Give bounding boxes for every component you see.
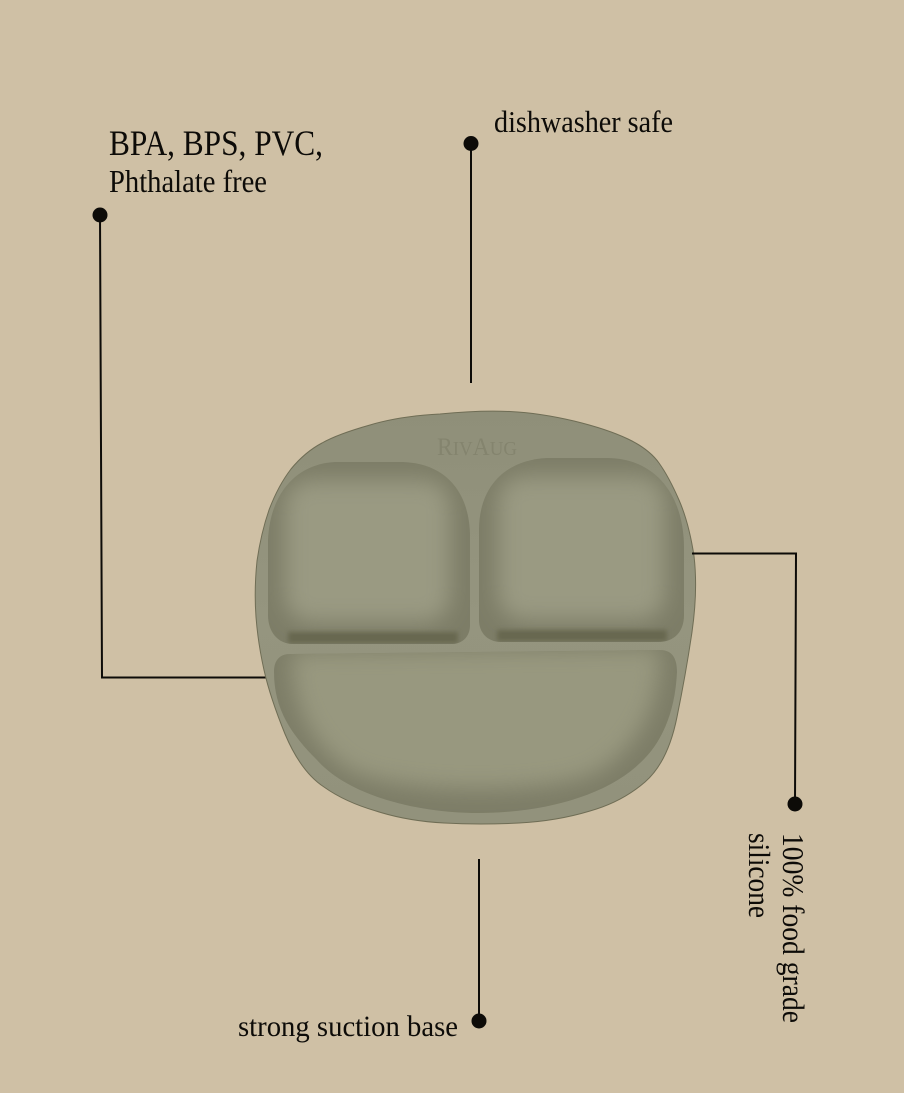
leader line with dot: food grade silicone xyxy=(692,554,802,812)
callout: dishwasher safe xyxy=(464,104,673,383)
callout: strong suction base xyxy=(238,859,486,1043)
compartment: top right xyxy=(479,458,684,642)
infographic canvas xyxy=(92,110,805,1042)
label: 100% food grade silicone: silicone xyxy=(742,833,777,918)
label: strong suction base: strong suction base xyxy=(238,1010,458,1043)
label: 100% food grade silicone xyxy=(742,833,811,1023)
leader line with dot: dishwasher safe xyxy=(464,136,478,383)
label: BPA, BPS, PVC, Phthalate free: Phthalate free xyxy=(109,163,267,199)
label: BPA, BPS, PVC, Phthalate free xyxy=(109,123,323,199)
label: BPA, BPS, PVC, Phthalate free: BPA, BPS, PVC, xyxy=(109,123,323,163)
label: 100% food grade silicone: 100% food grade xyxy=(776,833,811,1023)
compartment: bottom xyxy=(270,645,682,817)
leader line with dot: chemical free xyxy=(92,208,272,678)
plate body xyxy=(255,411,696,824)
compartment: top left xyxy=(268,462,470,644)
label: dishwasher safe: dishwasher safe xyxy=(494,104,673,139)
callout: chemical free xyxy=(92,123,323,678)
callout: food grade silicone xyxy=(692,554,811,1023)
plate illustration xyxy=(255,411,696,824)
leader line with dot: suction base xyxy=(472,859,486,1028)
brand mark: RIVAUG: RIVAUG xyxy=(437,434,517,461)
